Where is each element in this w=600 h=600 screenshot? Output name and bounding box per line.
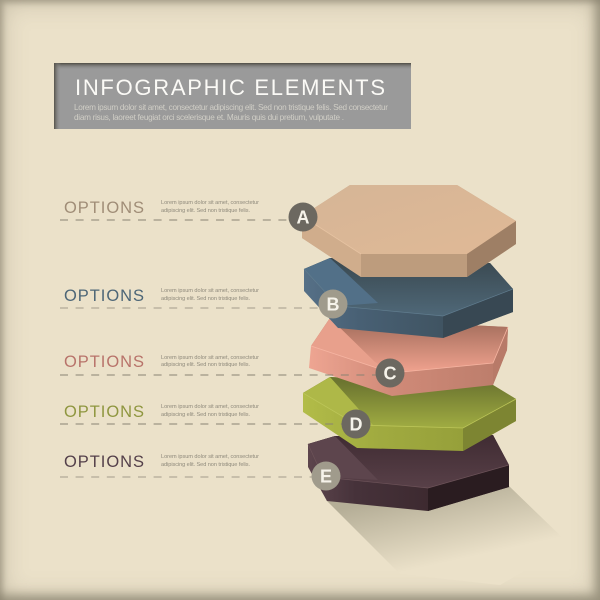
badge B — [318, 290, 348, 318]
option B: Lorem ipsum dolor sit amet, consectetur — [161, 288, 259, 294]
option B: OPTIONS — [64, 287, 144, 305]
long cast shadow — [326, 486, 570, 585]
option D: OPTIONS — [64, 403, 144, 421]
badge B: B — [326, 294, 340, 314]
banner description: Lorem ipsum dolor sit amet, consectetur adipiscing elit. Sed non tristique felis. Sed consectetur — [74, 103, 388, 112]
option C: Lorem ipsum dolor sit amet, consectetur — [161, 355, 259, 361]
option A: OPTIONS — [64, 199, 144, 217]
option E: adipiscing elit. Sed non tristique felis. — [161, 462, 250, 468]
banner description — [74, 103, 388, 122]
layer C: salmon hexagon — [309, 318, 508, 396]
badge A — [288, 202, 318, 232]
badge D — [342, 410, 370, 438]
option D: adipiscing elit. Sed non tristique felis. — [161, 412, 250, 418]
layer A: tan hexagon — [302, 185, 516, 277]
badge E — [312, 462, 340, 490]
option E: Lorem ipsum dolor sit amet, consectetur — [161, 454, 259, 460]
title banner — [54, 63, 411, 129]
option C — [64, 353, 259, 371]
option E — [64, 453, 259, 471]
banner description: diam risus, laoreet feugiat orci scelerisque et. Mauris quis dui pretium, vulputate . — [74, 113, 344, 122]
option A — [64, 199, 259, 217]
badge D: D — [350, 414, 362, 434]
badge A: A — [296, 208, 310, 228]
layer B: slate blue hexagon — [304, 258, 513, 338]
option C: adipiscing elit. Sed non tristique felis. — [161, 362, 250, 368]
option B — [64, 287, 259, 305]
layer D: olive hexagon — [303, 377, 516, 451]
option D: Lorem ipsum dolor sit amet, consectetur — [161, 404, 259, 410]
option A: adipiscing elit. Sed non tristique felis. — [161, 208, 250, 214]
title: INFOGRAPHIC ELEMENTS — [75, 75, 385, 100]
option A: Lorem ipsum dolor sit amet, consectetur — [161, 200, 259, 206]
dashed leader lines — [60, 220, 378, 477]
option B: adipiscing elit. Sed non tristique felis. — [161, 296, 250, 302]
option E: OPTIONS — [64, 453, 144, 471]
badge C: C — [384, 364, 396, 384]
option D — [64, 403, 259, 421]
layer E: dark plum hexagon — [308, 435, 509, 511]
option C: OPTIONS — [64, 353, 144, 371]
badge E: E — [320, 466, 332, 486]
badge C — [376, 358, 404, 388]
